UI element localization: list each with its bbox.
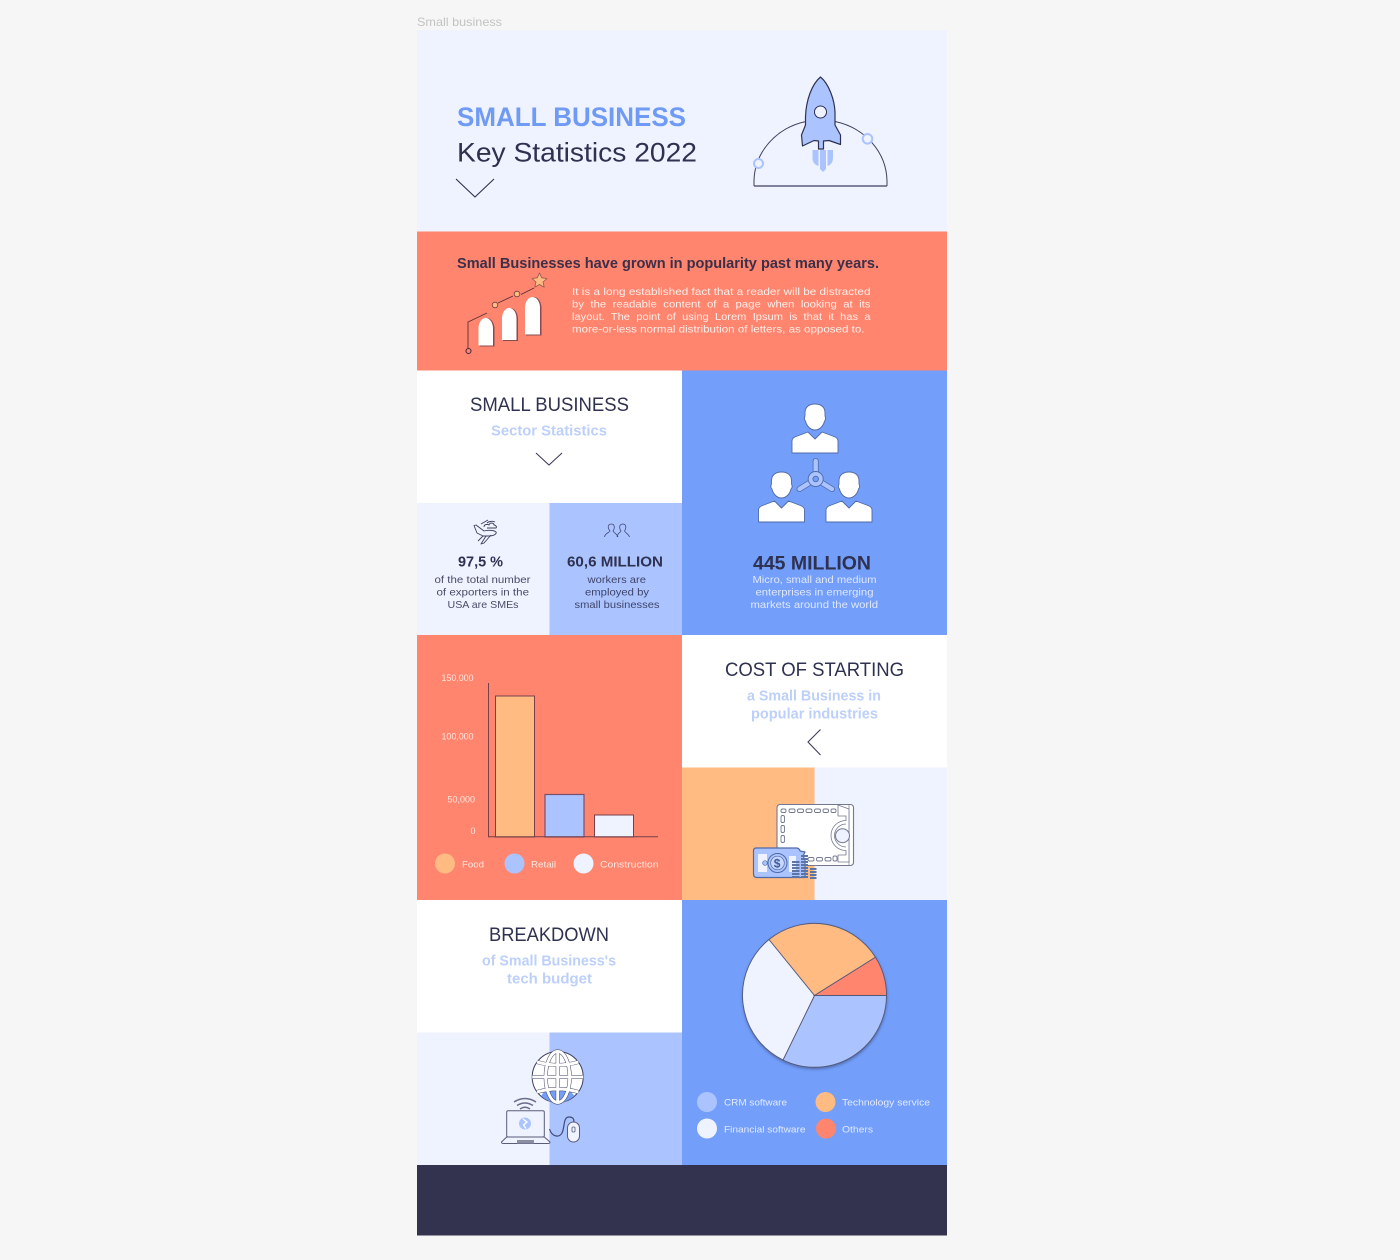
bar chart axis labels: 150,000 [442,673,474,683]
panel: enterprises stat: 445 MILLION [753,554,871,574]
icon: plane and clouds [474,520,496,544]
bar chart axis labels: 0 [470,826,476,836]
page label: Small business [417,15,502,29]
icon: mouse and cable [550,1117,580,1142]
panel: workers stat [550,503,682,635]
workers description [574,574,660,611]
bar: construction [594,815,634,837]
panel: enterprises stat [682,370,947,635]
panel: breakdown heading: BREAKDOWN [489,925,609,946]
exporters description [434,574,531,611]
enterprises description: Micro, small and medium [752,574,877,586]
panel: bar chart [417,635,682,900]
bar: retail [545,794,584,837]
panel: sector statistics heading [417,370,682,503]
panel: intro [417,232,947,370]
panel: breakdown heading [417,900,682,1032]
panel: cost of starting heading: popular industries [751,706,878,722]
arrow: sector chevron [536,453,562,465]
panel: exporters stat [417,503,550,635]
title: Key Statistics 2022 [457,138,697,168]
bar chart legend: Retail [531,860,556,870]
intro heading: Small Businesses have grown in popularity past many years. [457,256,879,272]
bar chart legend: Food [462,860,484,870]
panel: workers stat: 60,6 MILLION [567,554,663,570]
pie chart [743,923,887,1069]
exporters description: of exporters in the [436,586,529,598]
pie chart legend [697,1092,930,1138]
bar chart axis labels: 50,000 [448,794,475,804]
panel: sector statistics heading: Sector Statistics [491,424,607,440]
icon: laptop [502,1111,550,1144]
panel: breakdown heading: of Small Business's [482,954,616,970]
arrow: left chevron [808,730,820,755]
panel: breakdown heading: tech budget [507,972,592,988]
enterprises description: enterprises in emerging [756,586,874,598]
workers description: workers are [586,574,646,586]
icon: wallet and money: $ [774,856,781,870]
pie chart legend: Others [842,1124,873,1136]
workers description: small businesses [574,599,660,611]
icon: connected people [758,404,872,522]
panel: pie chart [682,900,947,1165]
pie chart legend: Technology service [842,1098,930,1108]
icon: two people outline [604,524,630,537]
bar chart axis labels [442,673,476,836]
bar chart legend: Construction [600,860,658,870]
exporters description: USA are SMEs [448,599,518,611]
panel: header [417,30,947,232]
arrow: header chevron [456,179,494,197]
exporters description: of the total number [434,574,531,586]
intro paragraph: It is a long established fact that a reader will be distracted [572,286,871,298]
bar chart legend [435,854,658,874]
pie chart legend: Financial software [724,1124,806,1136]
chart axes [488,683,658,837]
panel: sector statistics heading: SMALL BUSINESS [470,395,629,416]
intro paragraph [572,286,871,336]
intro paragraph: by the readable content of a page when looking at its [572,298,870,310]
panel: wallet [682,768,947,900]
enterprises description: markets around the world [750,599,878,611]
bar: food [496,696,534,837]
enterprises description [750,574,878,611]
panel: cost of starting heading: COST OF STARTING [725,660,904,681]
intro paragraph: layout. The point of using Lorem Ipsum is that it has a [572,311,871,323]
icon: growth chart with star [466,273,547,354]
icon: rocket over dome [754,77,887,186]
panel: exporters stat: 97,5 % [458,554,503,570]
intro paragraph: more-or-less normal distribution of letters, as opposed to. [572,324,864,336]
title [457,102,697,168]
icon: connector hub [800,461,832,489]
panel: technology icons [417,1032,682,1165]
workers description: employed by [585,586,650,598]
panel: cost of starting heading [682,635,947,768]
icon: wifi signal [514,1098,536,1109]
panel: cost of starting heading: a Small Business in [747,688,881,704]
title: SMALL BUSINESS [457,102,686,132]
icon: wallet and money [754,804,854,878]
bar chart axis labels: 100,000 [442,732,474,742]
footer band [417,1165,947,1236]
icon: globe [532,1052,583,1103]
pie chart legend: CRM software [724,1098,787,1108]
